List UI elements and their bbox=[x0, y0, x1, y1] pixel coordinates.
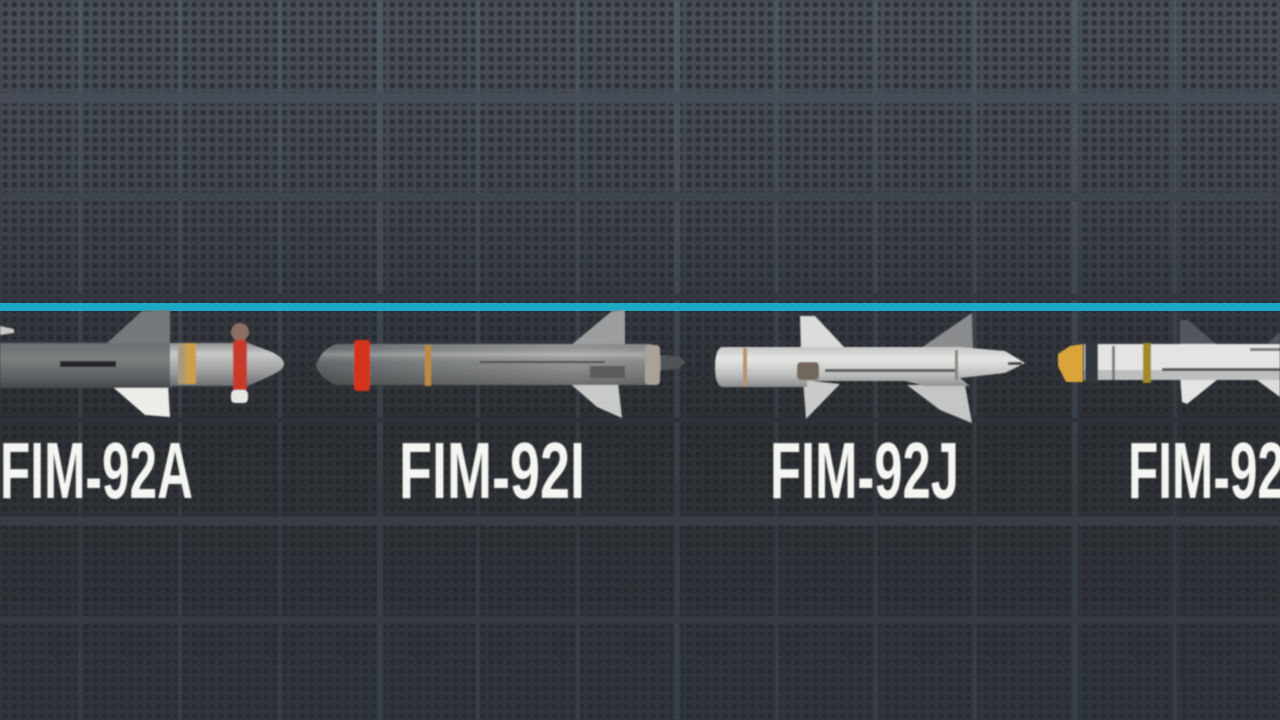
label: FIM-92J: 92J bbox=[874, 426, 959, 515]
label: FIM-92I: - bbox=[492, 432, 510, 521]
label: FIM-92J: FIM bbox=[770, 426, 908, 515]
label: FIM-92I: 92I bbox=[510, 426, 585, 515]
label: FIM-92 (cropped): - bbox=[1213, 432, 1230, 521]
missile: FIM-92J bbox=[715, 313, 1025, 423]
label: FIM-92I: FIM bbox=[399, 426, 537, 515]
label: FIM-92J: - bbox=[857, 432, 874, 521]
cyan timeline line bbox=[0, 303, 1280, 311]
missile: FIM-92A bbox=[0, 310, 284, 417]
label: FIM-92 (cropped): FIM bbox=[1128, 426, 1266, 515]
missile: FIM-92I bbox=[316, 310, 686, 418]
missile: fourth variant (cropped) bbox=[1058, 320, 1280, 404]
label: FIM-92A: FIM bbox=[0, 426, 138, 515]
label: FIM-92A: 92A bbox=[102, 426, 193, 515]
label: FIM-92A: - bbox=[85, 432, 102, 521]
